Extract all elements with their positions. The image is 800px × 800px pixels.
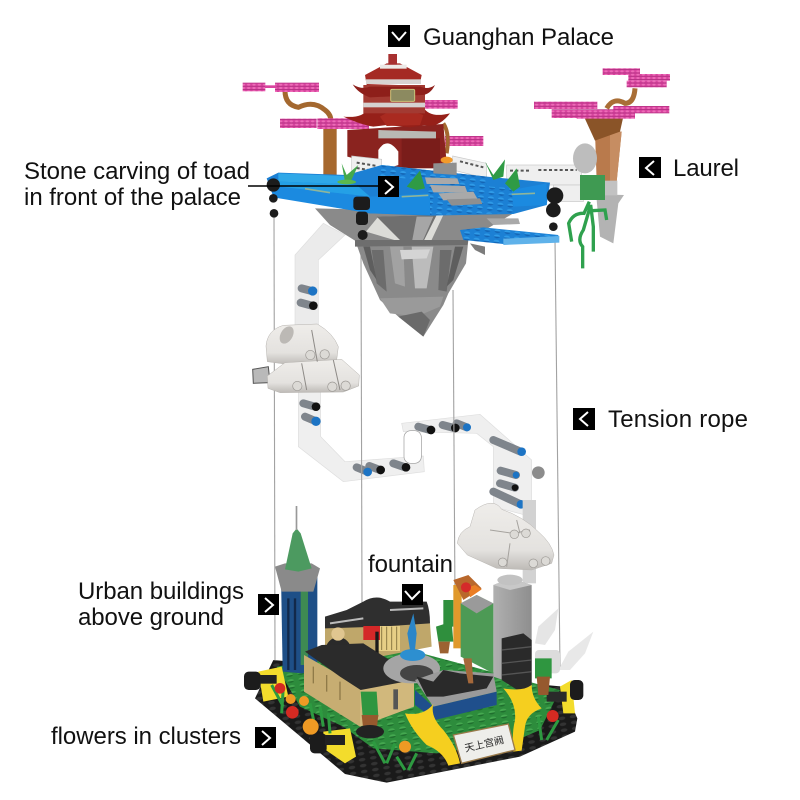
label: fountain [368,551,453,605]
back tan building [325,597,432,672]
label text: Laurel [673,155,739,182]
yellow stripes [305,189,535,197]
colonnade [377,626,400,651]
black base plate [255,660,577,783]
label: stone carving of toad: in front of the palace [24,184,241,211]
floating island [243,54,670,337]
tension ropes [274,215,560,668]
dark roof [325,597,430,628]
label text: fountain [368,551,453,578]
jet [407,613,417,650]
lower tier [267,359,359,393]
yellow flame ornaments [405,685,542,766]
label: urban buildings [78,578,279,631]
label: Laurel [639,155,739,182]
label text: Urban buildings [78,578,244,605]
dome [326,637,351,663]
chevron icon [573,408,595,430]
upper rock [315,208,513,242]
white ridge [380,65,407,69]
leader line [248,185,380,187]
moon lamp [573,143,597,173]
black stack [502,633,532,692]
blue top surface [380,165,513,215]
left side clip [253,367,270,383]
branch [285,91,331,122]
chevron icon [388,25,410,47]
lower rock [355,240,468,337]
blue deck [267,165,550,216]
potted tree front [356,692,384,738]
small right branch [443,123,448,153]
fountain [383,613,440,683]
middle storey [363,85,425,113]
upper clear bracket [295,223,345,327]
right cloud and column [457,500,593,673]
city base [244,500,593,783]
lower clear bracket [298,392,424,482]
sign text: 天上宫阙 [463,733,505,755]
front tan building [304,627,414,727]
green plants [337,159,520,192]
tower collar [275,563,320,592]
name sign [453,724,515,763]
top roof [365,63,422,85]
label: flowers in clusters [51,723,276,750]
front band [273,186,430,215]
vine stems [569,202,607,268]
clock tower [275,506,320,673]
palace grey lintel [378,130,436,138]
trunk [323,125,337,180]
antenna [296,506,297,530]
finial [388,54,397,65]
roots top [584,117,623,141]
green tower [443,575,493,673]
basin [383,653,440,683]
grey tower [493,575,532,692]
palace [343,54,450,172]
left cloud support [253,324,359,393]
railing pattern [357,161,577,171]
potted tree right [535,658,552,695]
right wall [360,680,414,727]
green ground [277,647,560,753]
lower eaves [343,107,450,127]
label text: Guanghan Palace [423,24,614,51]
back-left yellow bracket [244,667,288,702]
sign board [453,724,515,763]
connector pins [301,286,526,509]
orange stud [441,157,453,163]
curved branch [607,88,635,108]
hanging vine [569,175,607,268]
plaque [391,89,415,101]
angel wings [535,608,558,645]
green spire [285,528,312,572]
right blossom tree [534,68,670,243]
right clear bracket [402,414,532,517]
label text: Stone carving of toad [24,158,250,185]
cloud dome [457,503,554,570]
blossoms [534,68,670,119]
chevron icon [258,594,279,615]
green block [580,175,605,200]
right yellow bracket [547,680,583,713]
water channel [415,658,497,720]
clear ring [404,431,421,463]
label: Tension rope [573,406,748,433]
lower blue plate [460,227,558,244]
left wall [304,655,360,727]
bowl [400,649,425,661]
tan wall [325,623,432,657]
flag [363,626,380,640]
palace base walls [347,124,447,170]
chevron icon [639,157,661,178]
upper tier [266,324,338,365]
chevron icon [255,727,276,748]
label text: flowers in clusters [51,723,241,750]
rock ribs [355,240,485,337]
tower body [281,575,317,673]
chevron icon [378,176,399,197]
pink blossoms [243,83,483,146]
front yellow bracket [310,728,356,763]
column [523,500,536,583]
upper eaves [353,84,435,97]
grey stairs [425,163,520,225]
transparent connecting brackets [295,223,545,517]
hinge [532,466,545,479]
flowers and grass [272,683,559,770]
arch opening [378,143,398,172]
chevron icon [402,584,423,605]
label text: Tension rope [608,406,748,433]
black roof [305,643,414,690]
white railing [352,156,583,202]
label: Guanghan Palace [388,24,614,51]
trunk [595,132,622,182]
label: urban buildings: above ground [78,604,224,631]
small tree [436,622,453,653]
left blossom tree [243,83,483,180]
label: stone carving of toad [24,158,399,211]
chimney [463,658,473,683]
anchor knobs [267,178,563,240]
root spike [584,194,624,243]
